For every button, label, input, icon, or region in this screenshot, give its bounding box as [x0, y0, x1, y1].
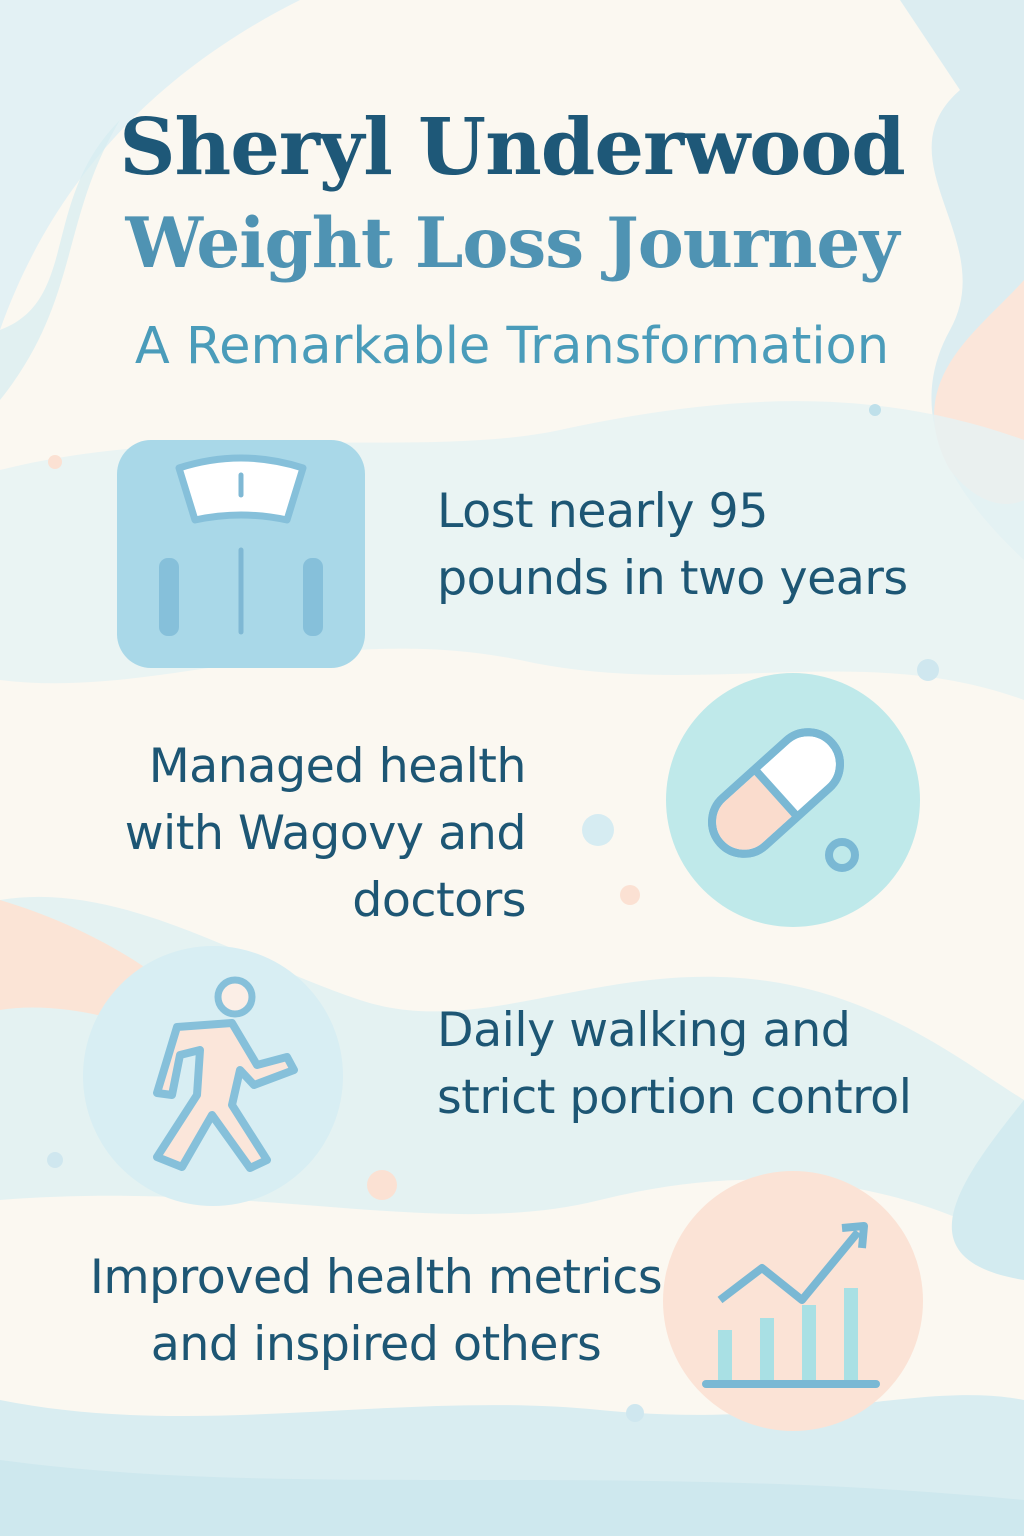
text: lost weight: pounds in two years	[437, 551, 908, 606]
text: managed health: doctors	[352, 873, 526, 928]
subtitle: A Remarkable Transformation	[135, 317, 889, 376]
text: improved: Improved health metrics	[90, 1250, 662, 1305]
text: managed health: Managed health	[149, 739, 526, 794]
icon: chart	[663, 1171, 923, 1431]
text: managed health	[125, 739, 526, 928]
text: improved: and inspired others	[151, 1317, 601, 1372]
text: daily walking: Daily walking and	[437, 1003, 850, 1058]
text: managed health: with Wagovy and	[125, 806, 526, 861]
text: daily walking: strict portion control	[437, 1070, 911, 1125]
title: Weight Loss Journey	[126, 203, 898, 284]
icon: pill	[666, 673, 920, 927]
text: improved	[90, 1250, 662, 1372]
text: lost weight: Lost nearly 95	[437, 484, 768, 539]
icon: walker	[83, 946, 343, 1206]
title: Sheryl Underwood	[119, 102, 905, 193]
title	[119, 102, 905, 284]
text: lost weight	[437, 484, 908, 606]
text: daily walking	[437, 1003, 911, 1125]
icon: scale	[117, 440, 365, 668]
